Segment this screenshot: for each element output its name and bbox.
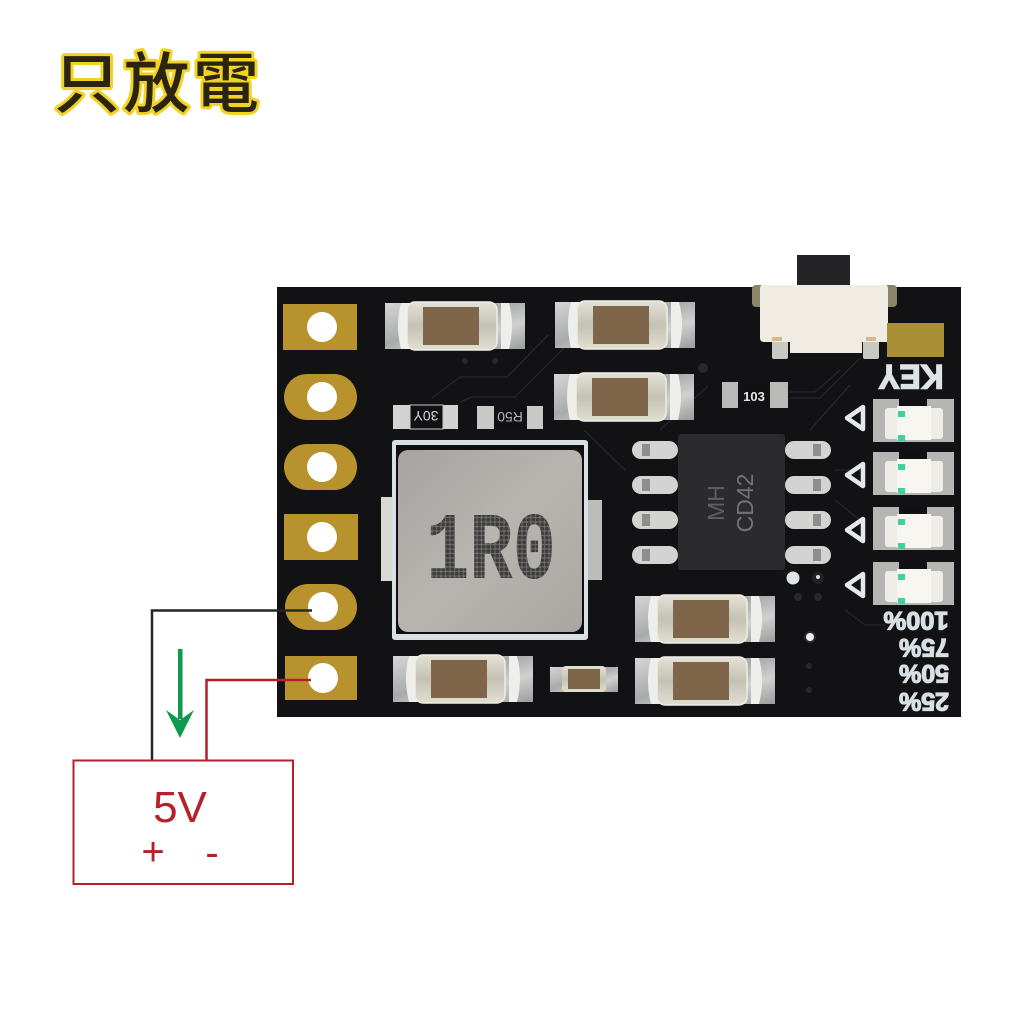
IC chip (632, 434, 831, 570)
inductor 1R0 (381, 440, 602, 640)
resistor 30Y: 30Y (413, 408, 438, 424)
resistor R50: R50 (497, 409, 523, 425)
plus terminal: + (141, 830, 165, 874)
LED 100% (873, 399, 954, 442)
minus terminal: - (205, 831, 219, 875)
100% label: 100% (884, 606, 948, 634)
inductor 1R0: 1R0 (426, 498, 556, 607)
title: 只放電 (54, 47, 259, 121)
25% label: 25% (899, 687, 949, 715)
solder pad 2 (284, 374, 357, 420)
LED 50% (873, 507, 954, 550)
test points and vias (462, 358, 824, 693)
LED 75% (873, 452, 954, 495)
capacitor bottom right (635, 657, 775, 705)
small capacitor (550, 666, 618, 692)
resistor 30Y (393, 405, 458, 429)
5V label: 5V (153, 783, 208, 832)
LED 25% (873, 562, 954, 605)
capacitor second row (554, 373, 694, 421)
circuit traces (432, 335, 885, 625)
IC marking MH: MH (703, 485, 729, 521)
5V power supply box (74, 760, 293, 884)
IC pins left (632, 441, 678, 564)
switch lever (797, 255, 850, 289)
KEY pad (887, 323, 944, 357)
polarity triangles (847, 407, 863, 596)
capacitor top left (385, 302, 525, 350)
IC body (678, 434, 785, 570)
wire: black lead from pad to supply (152, 610, 312, 760)
capacitor top middle (555, 301, 695, 349)
slide switch (752, 285, 897, 359)
solder pad 5 (285, 584, 357, 630)
capacitor lower right (635, 595, 775, 643)
solder pad 3 (284, 444, 357, 490)
75% label: 75% (899, 633, 949, 661)
percent labels (884, 606, 949, 715)
arrow: current direction (166, 649, 194, 738)
resistor 103: 103 (743, 389, 765, 404)
resistor R50 (477, 406, 543, 429)
board substrate (277, 287, 961, 717)
wire: red lead from pad to supply (206, 680, 311, 760)
50% label: 50% (899, 659, 949, 687)
IC pins right (785, 441, 831, 564)
KEY label: KEY (878, 357, 944, 395)
IC marking CD42: CD42 (732, 474, 758, 532)
solder pad 6 (285, 656, 357, 700)
resistor 103 (722, 382, 788, 408)
circuit board module (277, 255, 961, 717)
solder pad 4 (284, 514, 358, 560)
solder pad 1 (283, 304, 357, 350)
capacitor bottom left (393, 655, 533, 703)
